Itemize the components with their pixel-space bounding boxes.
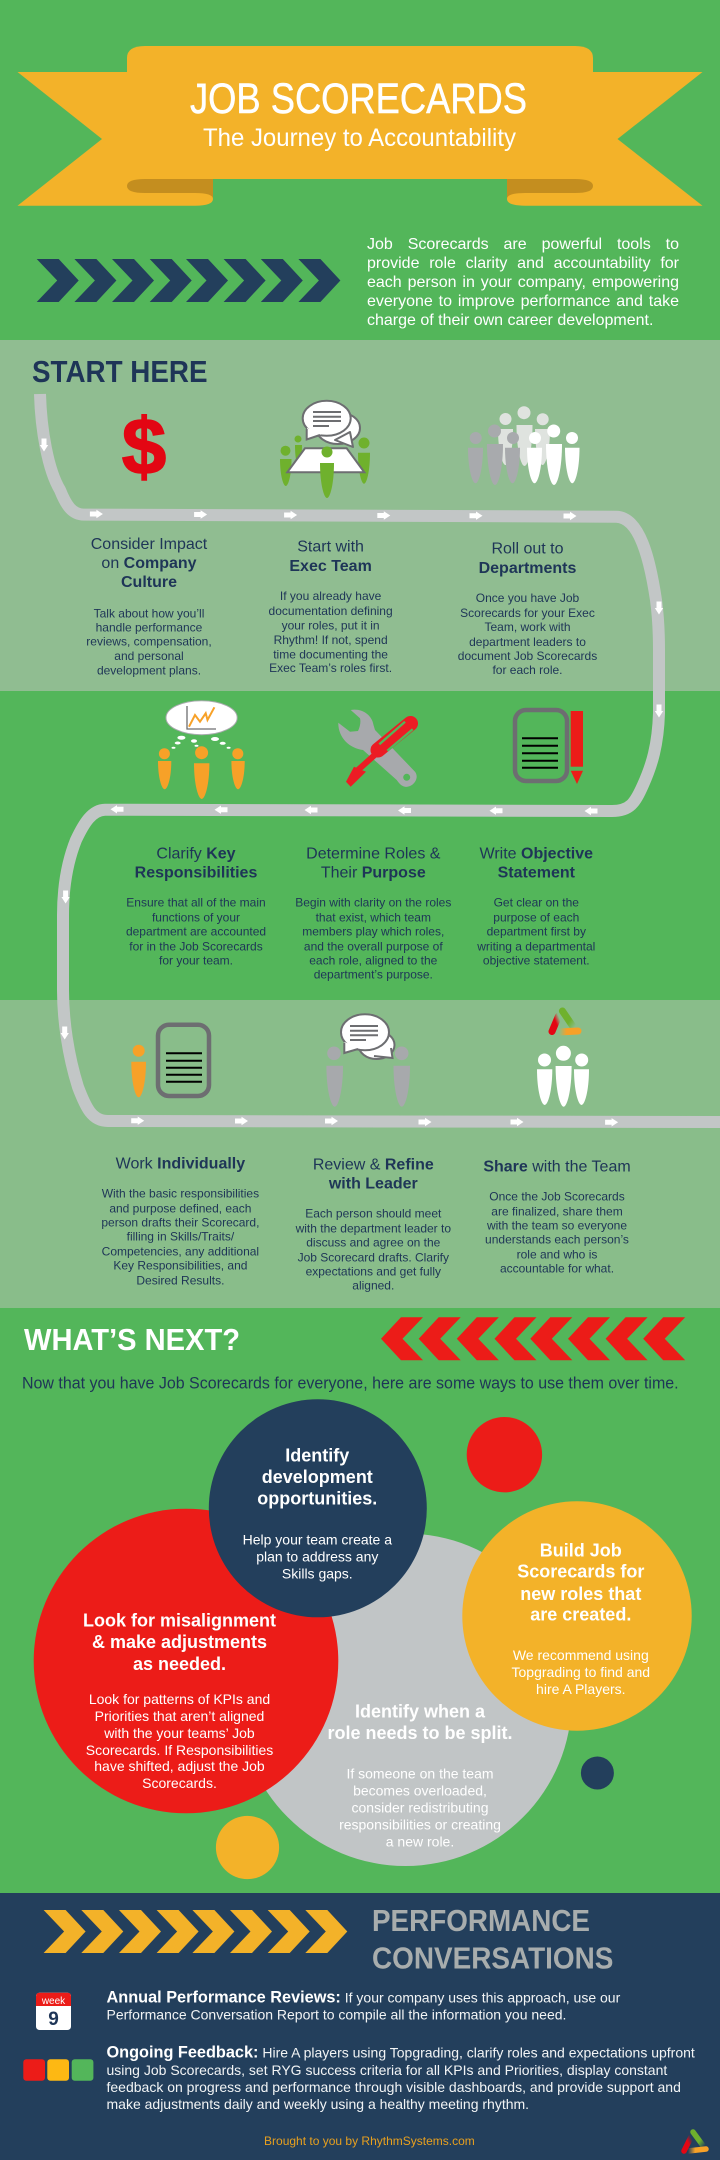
step: determine roles and their purpose xyxy=(295,845,451,982)
step: consider impact on company culture: handle performance xyxy=(96,621,203,635)
icon: wrench and screwdriver xyxy=(338,710,417,787)
step: start with exec team: Exec Team xyxy=(289,558,372,575)
circle: identify development opportunities: Skills gaps. xyxy=(282,1565,353,1581)
circle: identify development opportunities: plan to address any xyxy=(256,1549,378,1565)
step: review and refine with leader: Review & Refine xyxy=(313,1156,434,1173)
step: review and refine with leader: expectations and get fully xyxy=(306,1265,441,1279)
icon: footer logo xyxy=(684,2132,706,2151)
icon: calendar week 9: week xyxy=(41,1996,66,2007)
circle: look for misalignment: Priorities that aren’t aligned xyxy=(95,1708,264,1724)
intro paragraph: charge of their own career development. xyxy=(367,312,653,329)
step: start with exec team: your roles, put it in xyxy=(282,618,380,632)
circle: identify when a role needs to be split: role needs to be split. xyxy=(327,1723,513,1743)
step: review and refine with leader: Each person should meet xyxy=(305,1206,442,1220)
step: share with the team: with the team so everyone xyxy=(486,1218,627,1232)
step: review and refine with leader xyxy=(295,1156,451,1293)
step: work individually: and purpose defined, each xyxy=(109,1201,251,1215)
step: start with exec team: Exec Team’s roles first. xyxy=(269,661,392,675)
text: ongoing feedback: feedback on progress and performance through visible dashboards, and provide support and xyxy=(106,2079,681,2095)
text: ongoing feedback: using Job Scorecards, set RYG success criteria for all KPIs and Priorities, display constant xyxy=(106,2062,667,2078)
icon: exec team meeting xyxy=(280,401,370,498)
text: ongoing feedback xyxy=(106,2044,695,2112)
circle: look for misalignment xyxy=(34,1509,338,1813)
step: determine roles and their purpose: and the overall purpose of xyxy=(304,940,443,954)
orange chevrons xyxy=(44,1910,347,1953)
step: roll out to departments: Roll out to xyxy=(491,541,564,558)
circle: look for misalignment: Scorecards. xyxy=(142,1775,217,1791)
step: roll out to departments: Team, work with xyxy=(484,620,571,634)
icon: department groups xyxy=(468,406,580,485)
step: clarify key responsibilities: department are accounted xyxy=(126,925,266,939)
section background: header xyxy=(0,0,720,340)
step: determine roles and their purpose: department’s purpose. xyxy=(314,968,433,982)
journey road with arrows xyxy=(40,394,720,1127)
text: ongoing feedback: Ongoing Feedback: Hire A players using Topgrading, clarify roles and expectations upfront xyxy=(106,2044,695,2062)
step: start with exec team: documentation defining xyxy=(269,604,393,618)
section background: third row xyxy=(0,1000,720,1308)
step: review and refine with leader: aligned. xyxy=(352,1279,394,1293)
step: share with the team: accountable for what. xyxy=(500,1262,614,1276)
step: consider impact on company culture: development plans. xyxy=(97,663,201,677)
step: roll out to departments: for each role. xyxy=(492,663,563,677)
text: ongoing feedback: make adjustments daily and weekly using a healthy meeting rhythm. xyxy=(106,2096,529,2112)
step: consider impact on company culture: on Company xyxy=(101,555,197,572)
step: consider impact on company culture xyxy=(86,536,212,677)
step: review and refine with leader: discuss and agree on the xyxy=(306,1236,441,1250)
circle: identify when a role needs to be split: consider redistributing xyxy=(352,1799,488,1815)
step: write objective statement: Write Objective xyxy=(480,845,593,862)
circle: look for misalignment: Scorecards. If Responsibilities xyxy=(86,1742,273,1758)
decorative dot: red xyxy=(467,1417,542,1492)
section background: what's next xyxy=(0,1308,720,1893)
step: clarify key responsibilities: for your team. xyxy=(159,954,233,968)
circle: identify development opportunities: Help your team create a xyxy=(243,1531,392,1547)
step: write objective statement: writing a departmental xyxy=(476,940,595,954)
circle: identify development opportunities: opportunities. xyxy=(257,1489,377,1509)
step: clarify key responsibilities: Clarify Key xyxy=(156,845,236,862)
decorative dot: navy xyxy=(581,1756,614,1790)
step: consider impact on company culture: Talk about how you’ll xyxy=(94,606,204,620)
icon: team thinking about a chart xyxy=(158,701,245,799)
step: clarify key responsibilities: for in the Job Scorecards xyxy=(129,940,263,954)
step: work individually: With the basic responsibilities xyxy=(102,1186,259,1200)
step: consider impact on company culture: Consider Impact xyxy=(91,536,208,553)
circle: look for misalignment: as needed. xyxy=(133,1654,226,1674)
step: start with exec team: Start with xyxy=(297,539,364,556)
circle: identify when a role needs to be split: a new role. xyxy=(386,1833,454,1849)
step: write objective statement: Get clear on the xyxy=(494,896,579,910)
heading: performance conversations: PERFORMANCE xyxy=(372,1903,590,1938)
step: write objective statement: purpose of each xyxy=(493,911,579,925)
circle: look for misalignment: have shifted, adjust the Job xyxy=(94,1758,265,1774)
circle: look for misalignment: with the your teams’ Job xyxy=(103,1725,255,1741)
step: work individually: Competencies, any additional xyxy=(102,1244,259,1258)
step: consider impact on company culture: reviews, compensation, xyxy=(86,635,212,649)
intro paragraph: Job Scorecards are powerful tools to xyxy=(367,236,679,253)
circle: build job scorecards for new roles: hire A Players. xyxy=(536,1681,626,1697)
icon: person with document xyxy=(131,1025,209,1097)
circle: build job scorecards for new roles: Topgrading to find and xyxy=(512,1664,650,1680)
circle: build job scorecards for new roles: Scorecards for xyxy=(517,1562,644,1582)
step: write objective statement: department first by xyxy=(487,925,586,939)
step: review and refine with leader: with Leader xyxy=(328,1175,418,1192)
intro sentence: what's next: Now that you have Job Scorecards for everyone, here are some ways to use them over time. xyxy=(22,1375,679,1393)
navy chevrons xyxy=(37,259,340,302)
title: JOB SCORECARDS xyxy=(190,75,527,123)
circle: identify when a role needs to be split: becomes overloaded, xyxy=(353,1782,487,1798)
circle: identify when a role needs to be split: responsibilities or creating xyxy=(339,1816,501,1832)
heading: what's next: WHAT’S NEXT? xyxy=(24,1322,240,1357)
heading: start here: START HERE xyxy=(32,354,208,389)
step: work individually: Desired Results. xyxy=(136,1273,224,1287)
circle: build job scorecards for new roles xyxy=(462,1501,692,1731)
step: share with the team: role and who is xyxy=(517,1248,597,1262)
intro paragraph: everyone to improve performance and take xyxy=(367,293,679,310)
circle: identify when a role needs to be split: Identify when a xyxy=(355,1702,486,1722)
intro paragraph: each person in your company, empowering xyxy=(367,274,679,291)
icon: dollar sign: $ xyxy=(122,402,166,491)
circle: build job scorecards for new roles: new roles that xyxy=(520,1584,641,1604)
step: clarify key responsibilities: Ensure that all of the main xyxy=(126,896,266,910)
step: determine roles and their purpose: that exist, which team xyxy=(316,911,431,925)
step: work individually xyxy=(101,1155,259,1287)
step: review and refine with leader: Job Scorecard drafts. Clarify xyxy=(298,1250,449,1264)
step: roll out to departments xyxy=(458,541,597,677)
step: clarify key responsibilities xyxy=(126,845,266,968)
red chevrons xyxy=(381,1317,685,1360)
step: determine roles and their purpose: members play which roles, xyxy=(302,925,444,939)
circle: identify when a role needs to be split xyxy=(239,1533,572,1866)
step: share with the team: Share with the Team xyxy=(483,1158,631,1175)
footer credit: Brought to you by RhythmSystems.com xyxy=(264,2134,475,2148)
step: share with the team: Once the Job Scorecards xyxy=(489,1189,625,1203)
step: share with the team: understands each person’s xyxy=(485,1233,629,1247)
step: roll out to departments: Scorecards for your Exec xyxy=(460,606,595,620)
step: roll out to departments: department leaders to xyxy=(469,635,586,649)
circle: identify development opportunities: development xyxy=(262,1467,373,1487)
heading: performance conversations xyxy=(372,1903,613,1976)
step: share with the team xyxy=(483,1158,631,1276)
circle: identify development opportunities xyxy=(209,1399,427,1617)
circle: build job scorecards for new roles: We recommend using xyxy=(513,1647,649,1663)
circle: build job scorecards for new roles: are created. xyxy=(530,1605,631,1625)
icon: calendar week 9: 9 xyxy=(48,2009,59,2030)
step: review and refine with leader: with the department leader to xyxy=(295,1221,451,1235)
step: determine roles and their purpose: Their Purpose xyxy=(321,864,426,881)
icon: red yellow green status squares xyxy=(23,2059,93,2081)
step: determine roles and their purpose: Determine Roles & xyxy=(306,845,441,862)
circle: identify when a role needs to be split: If someone on the team xyxy=(346,1765,494,1781)
circle: identify development opportunities: Identify xyxy=(285,1446,349,1466)
circle: build job scorecards for new roles: Build Job xyxy=(540,1541,622,1561)
step: work individually: person drafts their Scorecard, xyxy=(101,1215,259,1229)
step: roll out to departments: Once you have Job xyxy=(476,591,580,605)
decorative dot: orange xyxy=(216,1816,279,1879)
circle: look for misalignment: & make adjustments xyxy=(92,1632,267,1652)
step: clarify key responsibilities: functions of your xyxy=(152,911,240,925)
intro paragraph: provide role clarity and accountability for xyxy=(367,255,679,272)
text: annual performance reviews: Annual Performance Reviews: If your company uses this approach, use our xyxy=(106,1989,621,2007)
step: work individually: Work Individually xyxy=(116,1155,245,1172)
circle: look for misalignment: Look for misalignment xyxy=(83,1611,276,1631)
section background: performance conversations xyxy=(0,1893,720,2160)
heading: performance conversations: CONVERSATIONS xyxy=(372,1940,613,1976)
icon: two people talking xyxy=(326,1014,410,1107)
icon: document and pencil xyxy=(515,710,583,784)
section background: second row xyxy=(0,691,720,1000)
step: start with exec team: If you already have xyxy=(280,589,382,603)
step: share with the team: are finalized, share them xyxy=(491,1204,623,1218)
icon: share with the team xyxy=(537,1011,589,1107)
step: work individually: Key Responsibilities, and xyxy=(113,1258,247,1272)
step: determine roles and their purpose: each role, aligned to the xyxy=(309,954,438,968)
circle: look for misalignment: Look for patterns of KPIs and xyxy=(89,1691,270,1707)
icon: calendar week 9 xyxy=(36,1993,71,2030)
step: work individually: filling in Skills/Traits/ xyxy=(127,1230,235,1244)
step: write objective statement: Statement xyxy=(498,864,576,881)
step: write objective statement xyxy=(476,845,595,968)
step: consider impact on company culture: Culture xyxy=(121,574,177,591)
step: write objective statement: objective statement. xyxy=(483,954,590,968)
step: roll out to departments: document Job Scorecards xyxy=(458,649,597,663)
step: roll out to departments: Departments xyxy=(479,560,576,577)
step: start with exec team: Rhythm! If not, spend xyxy=(274,633,388,647)
section background: start here row xyxy=(0,340,720,691)
text: annual performance reviews xyxy=(106,1989,621,2022)
step: consider impact on company culture: and personal xyxy=(114,649,184,663)
step: determine roles and their purpose: Begin with clarity on the roles xyxy=(295,896,451,910)
title ribbon banner xyxy=(18,46,702,209)
step: start with exec team: time documenting the xyxy=(273,647,388,661)
text: annual performance reviews: Performance Conversation Report to compile all the information you need. xyxy=(106,2006,566,2022)
step: clarify key responsibilities: Responsibilities xyxy=(135,864,257,881)
subtitle: The Journey to Accountability xyxy=(203,124,516,152)
step: start with exec team xyxy=(269,539,393,675)
intro paragraph xyxy=(367,236,679,329)
